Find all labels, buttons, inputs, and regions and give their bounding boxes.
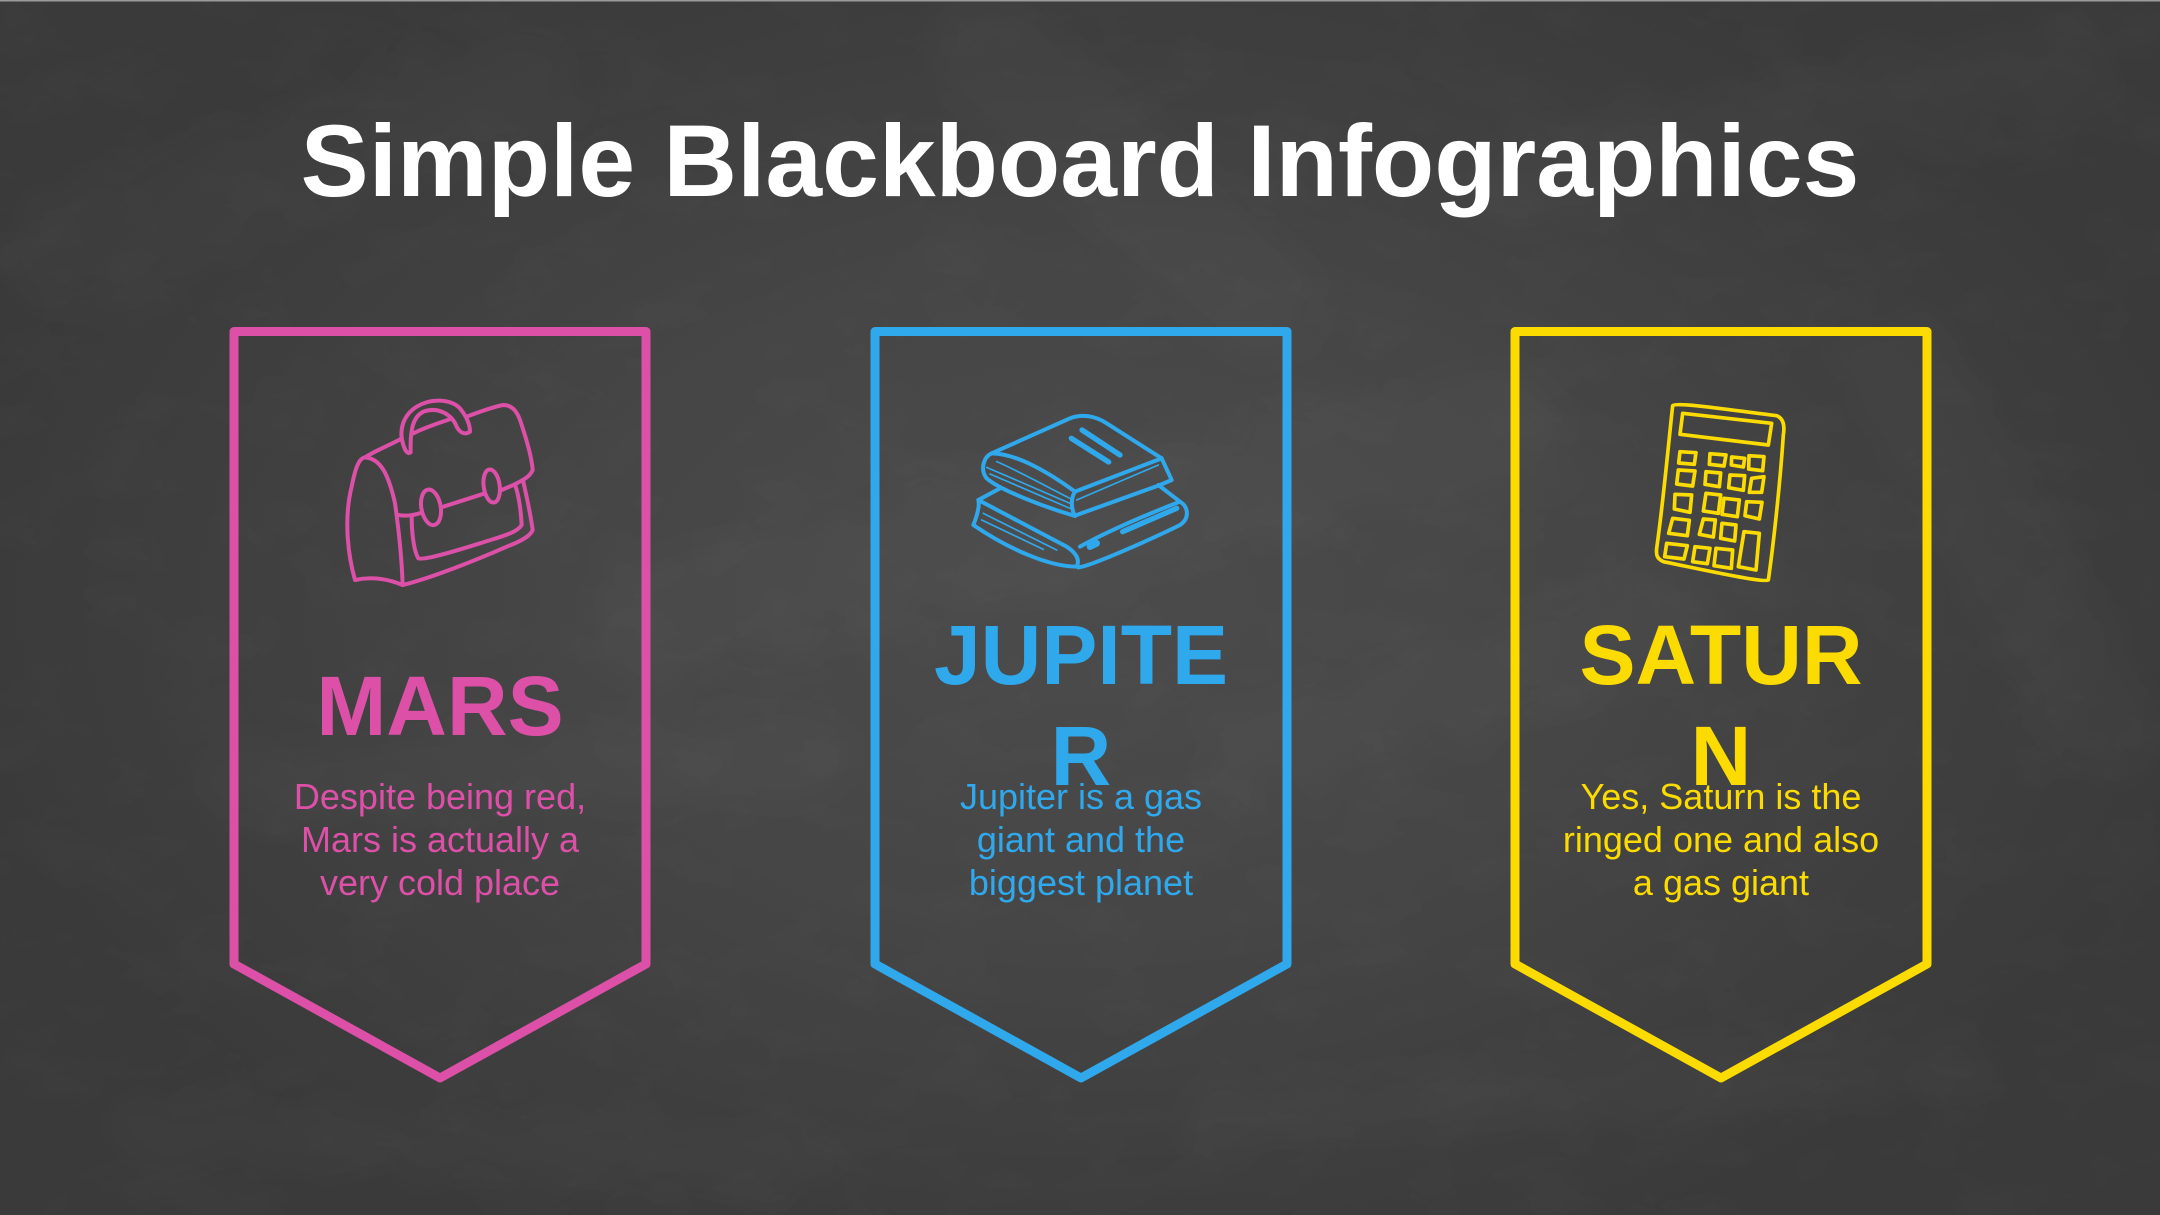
heading: JUPITER: JUPITE <box>934 608 1228 702</box>
text: Jupiter description: Jupiter is a gas <box>960 776 1202 817</box>
text: Jupiter description: giant and the <box>977 819 1185 860</box>
heading: SATURN: N <box>1691 709 1751 803</box>
text: Saturn description: ringed one and also <box>1563 819 1879 860</box>
icon: stacked books <box>973 416 1187 567</box>
text: Mars description: very cold place <box>320 862 560 903</box>
text: Saturn description: a gas giant <box>1633 862 1809 903</box>
heading: JUPITER: R <box>1051 709 1111 803</box>
text: Mars description: Mars is actually a <box>301 819 580 860</box>
panel: Jupiter <box>875 332 1287 1078</box>
text: Saturn description: Yes, Saturn is the <box>1581 776 1861 817</box>
heading: MARS: MARS <box>316 659 564 753</box>
text: Mars description: Despite being red, <box>294 776 586 817</box>
panel: Saturn <box>1515 332 1927 1078</box>
title: Simple Blackboard Infographics <box>301 104 1859 218</box>
banner outline: Jupiter <box>875 332 1287 1078</box>
banner outline: Mars <box>234 332 646 1078</box>
text: Jupiter description: biggest planet <box>969 862 1193 903</box>
icon: school bag <box>347 401 533 585</box>
icon: calculator <box>1656 405 1784 580</box>
panel: Mars <box>234 332 646 1078</box>
banner outline: Saturn <box>1515 332 1927 1078</box>
heading: SATURN: SATUR <box>1579 608 1863 702</box>
